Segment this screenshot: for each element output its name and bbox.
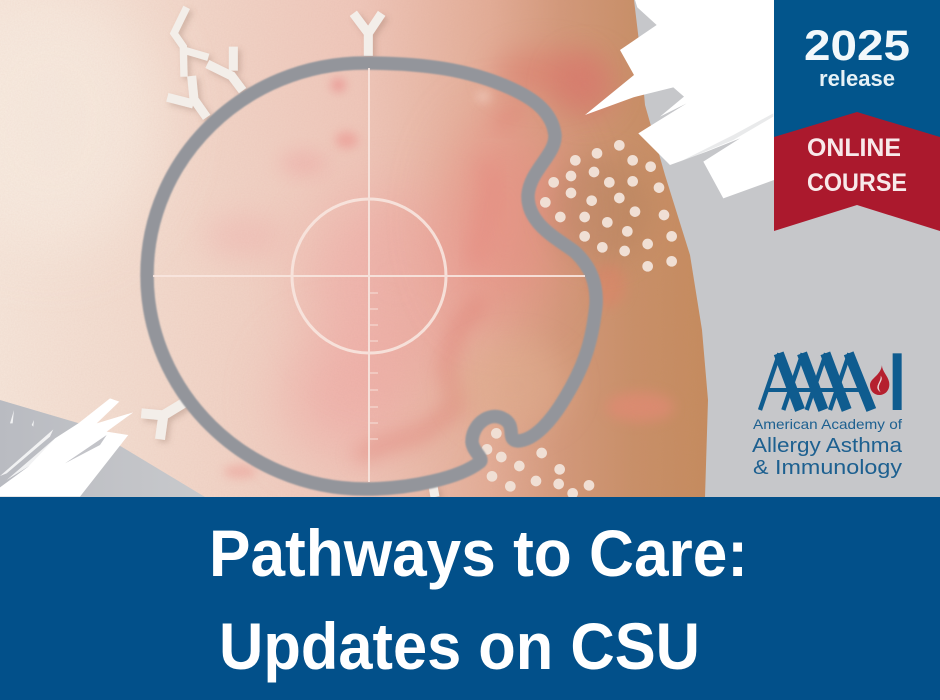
antibody: top center xyxy=(353,13,382,56)
crosshair xyxy=(153,68,585,482)
dots: upper right cluster xyxy=(540,140,677,272)
AAAAI logo: & Immunology xyxy=(753,457,902,479)
blue year tag xyxy=(774,0,940,140)
white brush stroke: bottom left xyxy=(0,398,133,497)
year: 2025 xyxy=(804,22,910,70)
title line 1: Pathways to Care: xyxy=(209,516,748,590)
antibody: top left third xyxy=(167,76,207,117)
skin photo background xyxy=(0,0,720,497)
grey panel: bottom left xyxy=(0,400,205,497)
antibody: top left chain xyxy=(174,7,208,77)
ribbon line 1: ONLINE xyxy=(807,134,901,162)
dots: lower cluster xyxy=(482,428,594,499)
antibody: top left second xyxy=(207,47,243,91)
AAAAI logo: Allergy Asthma xyxy=(752,435,903,457)
target ring xyxy=(147,63,596,489)
antibody: lower left xyxy=(141,402,185,439)
red ribbon: online course xyxy=(774,112,940,231)
white brush stroke: top right xyxy=(585,0,774,198)
antibody: bottom stub xyxy=(433,486,435,497)
rash areas drawn in crop coordinates xyxy=(203,50,593,478)
logo text: American Academy of xyxy=(753,416,902,432)
title banner xyxy=(0,497,940,700)
AAAAI logo xyxy=(752,353,903,479)
title line 2: Updates on CSU xyxy=(219,609,700,683)
release label: release xyxy=(819,66,895,91)
grey panel: right side xyxy=(634,0,940,497)
ribbon line 2: COURSE xyxy=(807,169,907,197)
antibody icons xyxy=(141,7,435,497)
logo mark xyxy=(760,353,902,410)
